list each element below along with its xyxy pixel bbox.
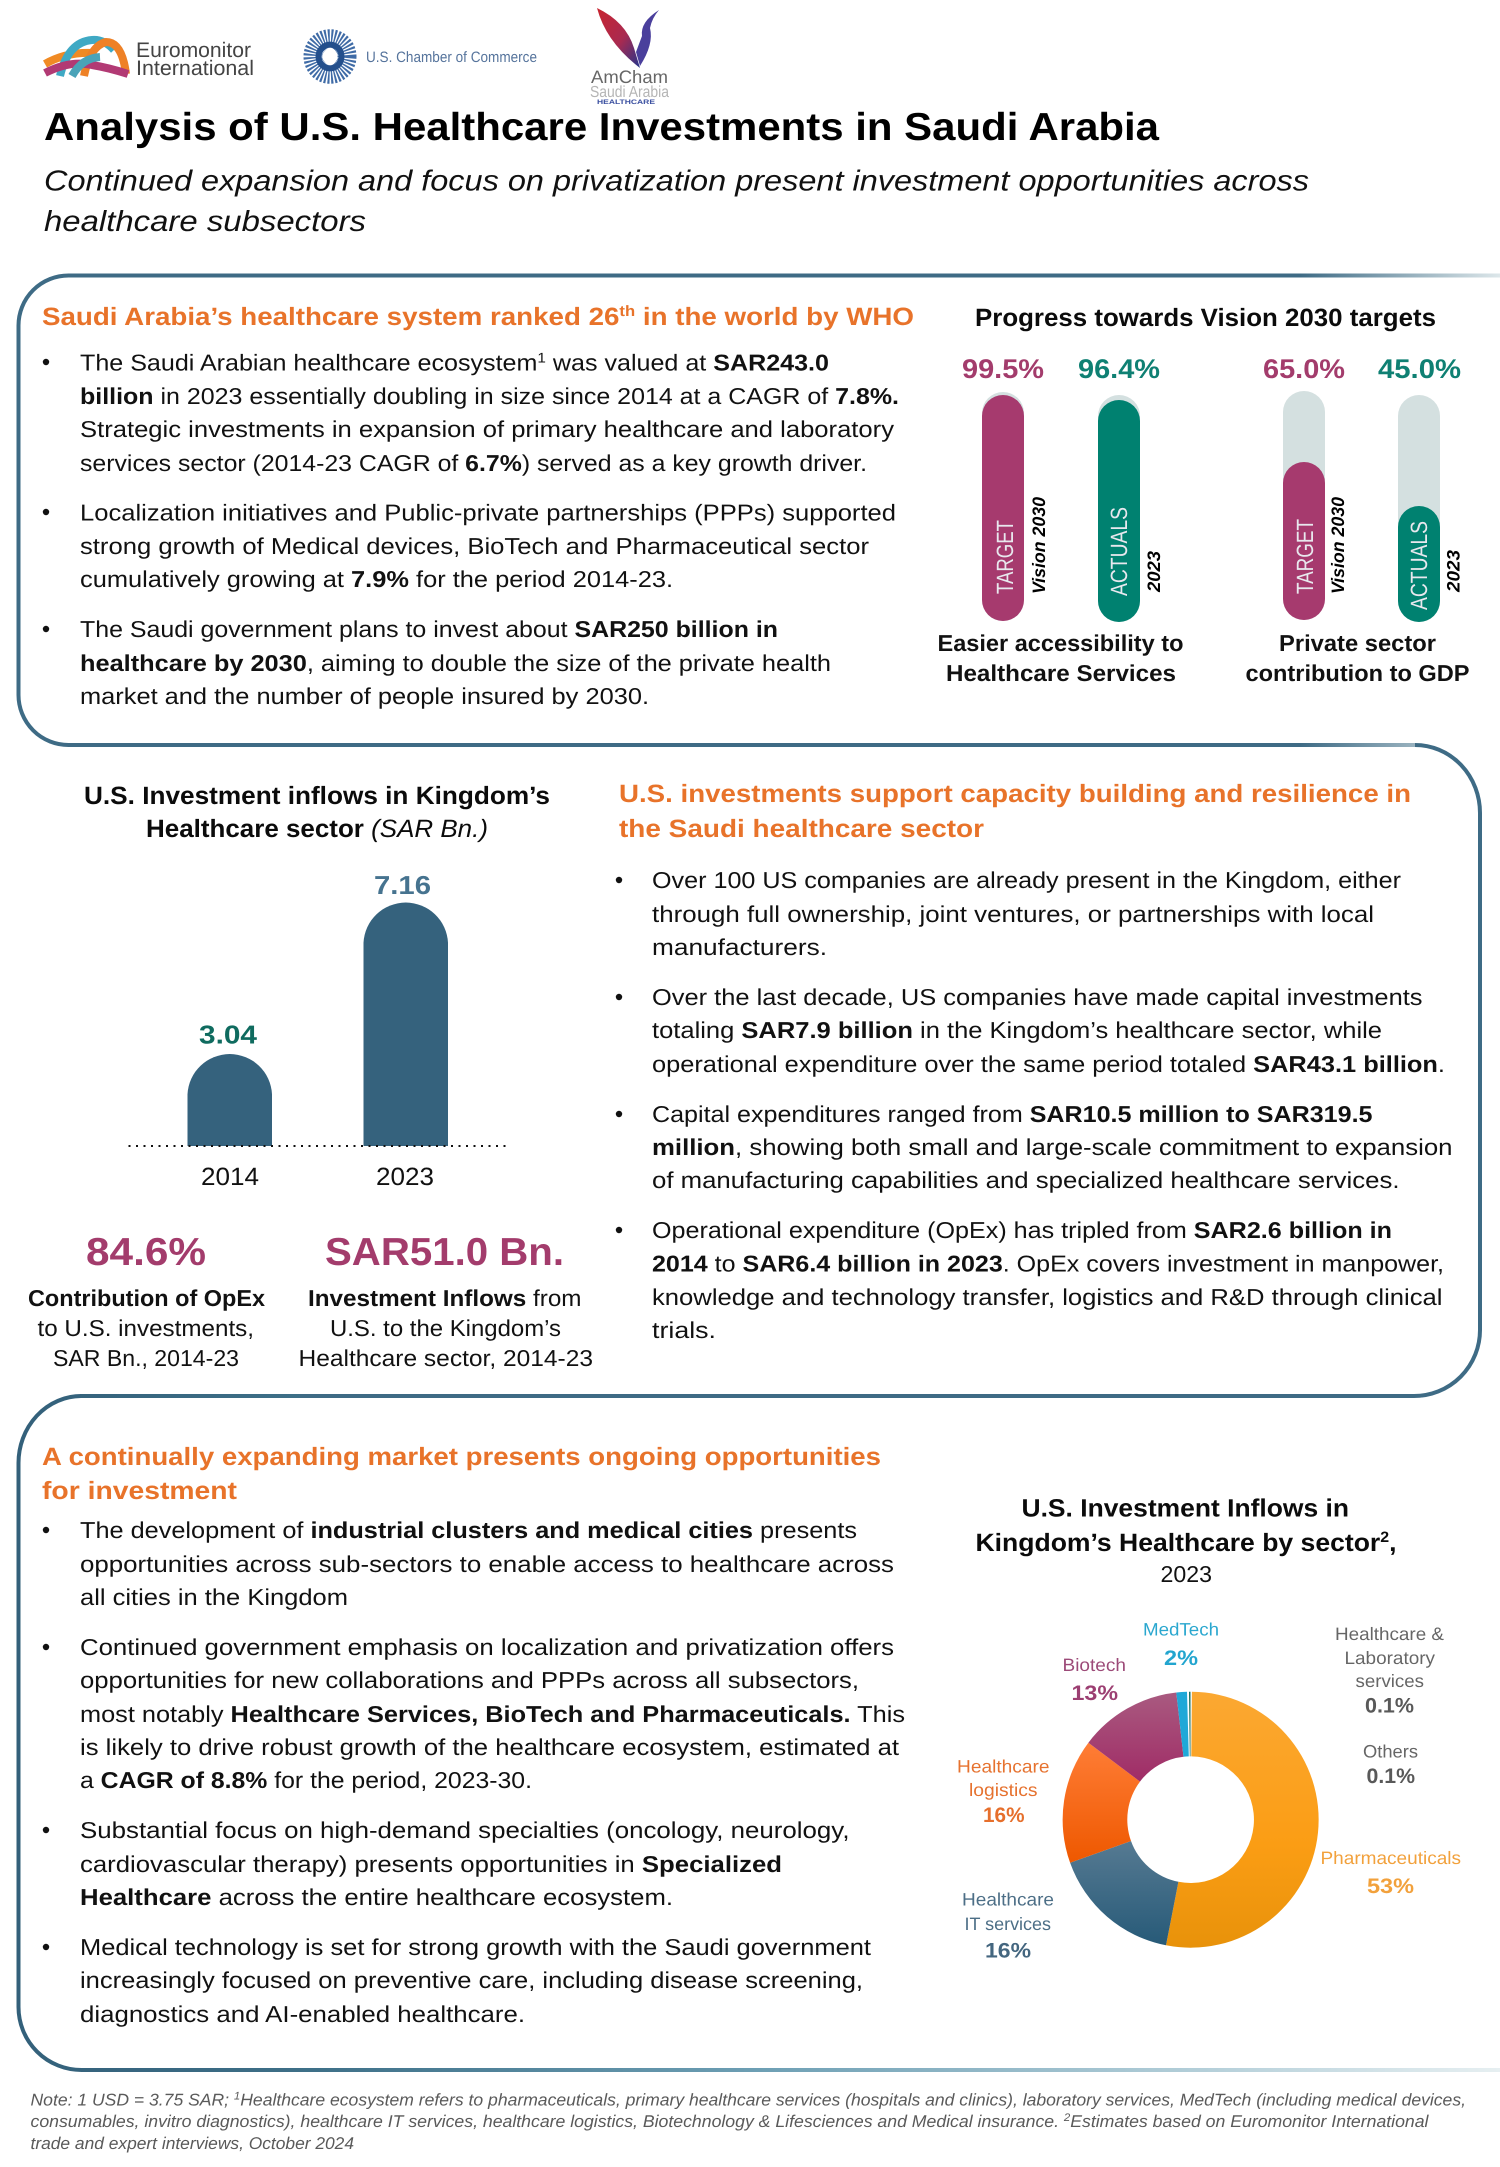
label: Healthcare and laboratory services: Healthcare & — [1335, 1624, 1444, 1644]
heading: expanding market: for investment — [42, 1477, 238, 1505]
bullet: industrial clusters: all cities in the Kingdom — [80, 1584, 348, 1610]
label: Healthcare IT services: Healthcare — [962, 1890, 1054, 1910]
footnote: trade and expert interviews, October 2024 — [30, 2134, 354, 2153]
bullet: US companies present: manufacturers. — [652, 934, 827, 960]
bullet: high-demand specialties: Substantial focus on high-demand specialties (oncology, neurology, — [80, 1817, 850, 1843]
label: MedTech: 2% — [1164, 1647, 1198, 1670]
bullet: industrial clusters: opportunities across sub-sectors to enable access to healthcare across — [80, 1551, 894, 1577]
label: Healthcare logistics — [957, 1756, 1050, 1827]
label: Others: 0.1% — [1366, 1765, 1415, 1788]
bullet: localization initiatives — [43, 500, 896, 592]
heading: system ranked 26th: in the world by WHO — [635, 303, 914, 331]
header logos — [45, 8, 669, 106]
bullet: government investment plan — [43, 616, 831, 709]
heading: inflows by sector: 2 — [1380, 1529, 1389, 1546]
panel: expanding market opportunities — [18, 1396, 1500, 2070]
segment: medtech — [1176, 1692, 1189, 1757]
bullet: industrial clusters — [43, 1517, 894, 1610]
bullet: government investment plan: The Saudi government plans to invest about SAR250 billion in — [80, 616, 778, 642]
bullet: government investment plan: healthcare by 2030 , aiming to double the size of the private health — [80, 650, 831, 676]
chart: private sector contribution bars: contribution to GDP — [1246, 660, 1470, 686]
label: Healthcare IT services: 16% — [985, 1940, 1031, 1962]
heading: capacity building — [619, 780, 1411, 843]
logo: Euromonitor International: International — [136, 57, 254, 80]
bullet: localization initiatives: strong growth of Medical devices, BioTech and Pharmaceutical sector — [80, 533, 869, 559]
label: Others: Others — [1363, 1742, 1418, 1762]
subtitle: Continued expansion and focus on privatization present investment opportunities across — [44, 166, 1309, 198]
bullet: government investment plan: market and the number of people insured by 2030. — [80, 683, 649, 709]
label: MedTech — [1143, 1620, 1219, 1670]
bullet: high-demand specialties: Healthcare across the entire healthcare ecosystem. — [80, 1884, 673, 1910]
footnote: consumables, invitro diagnostics), healthcare IT services, healthcare logistics, Biotechnology & Lifesciences and Medical insurance. — [30, 2112, 1021, 2131]
bullet: localization and privatization — [43, 1634, 905, 1793]
heading: system ranked 26th: Saudi Arabia’s healthcare system ranked 26 — [42, 303, 563, 331]
bullet: operational expenditure: 2014 to SAR6.4 billion in 2023 . OpEx covers investment in manpower, — [652, 1250, 1444, 1276]
bullet: US companies present: through full ownership, joint ventures, or partnerships with local — [652, 901, 1374, 927]
heading: system ranked 26th: th — [619, 303, 635, 320]
title: Analysis of U.S. Healthcare Investments in Saudi Arabia — [44, 106, 1159, 149]
stat: OpEx contribution: SAR Bn., 2014-23 — [53, 1345, 239, 1371]
stat: OpEx contribution: to U.S. investments, — [38, 1315, 254, 1341]
heading: expanding market: A continually expanding market presents ongoing opportunities — [42, 1443, 881, 1471]
footnote: 2 — [1063, 2112, 1070, 2124]
chart: easier accessibility progress bars: Easier accessibility to — [938, 630, 1184, 656]
bullet: capital investments: operational expenditure over the same period totaled SAR43.1 billion . — [652, 1051, 1445, 1077]
bar chart: inflows 2014 vs 2023: 2023 — [376, 1163, 434, 1191]
label: Others — [1363, 1742, 1418, 1788]
chart: private sector contribution bars: Private sector — [1279, 630, 1436, 656]
bullet: medical technology growth: increasingly focused on preventive care, including disease screening, — [80, 1967, 863, 1993]
chart: easier accessibility progress bars: ACTUALS — [1106, 507, 1132, 596]
bullet: localization and privatization: is likely to drive robust growth of the healthcare ecosystem, estimated at — [80, 1734, 900, 1760]
bullet: healthcare ecosystem value: services sector (2014-23 CAGR of 6.7%) served as a key growth driver. — [80, 450, 867, 476]
segment: others — [1189, 1692, 1190, 1756]
chart: easier accessibility progress bars: Healthcare Services — [946, 660, 1176, 686]
heading: inflows by sector: Kingdom’s Healthcare by sector — [976, 1529, 1357, 1557]
chart: private sector contribution bars: 2023 — [1444, 550, 1464, 593]
chart: easier accessibility progress bars: Vision 2030 — [1029, 497, 1049, 594]
bullet: US companies present — [616, 867, 1401, 960]
bar chart: inflows 2014 vs 2023: 3.04 — [199, 1020, 258, 1050]
logo: AmCham Saudi Arabia Healthcare: HEALTHCARE — [597, 99, 656, 106]
chart: private sector contribution bars: TARGET — [1292, 519, 1318, 594]
subtitle — [44, 166, 1309, 238]
label: Pharmaceuticals — [1320, 1848, 1461, 1898]
logo: AmCham Saudi Arabia Healthcare — [590, 8, 669, 106]
panel: healthcare system ranking — [18, 276, 1500, 745]
bullet: capital expenditures: Capital expenditures ranged from SAR10.5 million to SAR319.5 — [652, 1101, 1373, 1127]
bullet: healthcare ecosystem value — [43, 350, 899, 476]
bullet: healthcare ecosystem value: billion in 2023 essentially doubling in size since 2014 at a CAGR of 7.8%. — [80, 383, 899, 409]
label: Healthcare IT services — [962, 1890, 1054, 1962]
heading: capacity building: U.S. investments support capacity building and resilience in — [619, 780, 1411, 808]
bullet: operational expenditure: trials. — [652, 1317, 716, 1343]
bullet: medical technology growth — [43, 1934, 872, 2027]
label: MedTech: MedTech — [1143, 1620, 1219, 1640]
footnote: 1 — [234, 2090, 240, 2102]
bullet: localization and privatization: Continued government emphasis on localization and privatization offers — [80, 1634, 894, 1660]
label: Biotech — [1062, 1655, 1126, 1705]
chart: easier accessibility progress bars: 99.5% — [962, 354, 1044, 384]
bullet: high-demand specialties — [43, 1817, 850, 1910]
logo: Euromonitor International: Euromonitor — [136, 39, 251, 62]
heading: Healthcare sector unit: Healthcare sector (SAR Bn.) — [146, 815, 488, 843]
chart: easier accessibility progress bars: TARGET — [992, 520, 1018, 594]
heading: expanding market — [42, 1443, 881, 1505]
segment: healthcare IT services — [1070, 1841, 1178, 1945]
label: Healthcare logistics: logistics — [969, 1780, 1038, 1800]
segment: healthcare logistics — [1063, 1743, 1140, 1863]
bullet: high-demand specialties: cardiovascular therapy) presents opportunities in Specialized — [80, 1851, 782, 1877]
bullet: capital investments: Over the last decade, US companies have made capital investments — [652, 984, 1422, 1010]
stat: total investment inflows: SAR51.0 Bn. — [325, 1231, 564, 1274]
footnote — [30, 2090, 1466, 2153]
heading: progress towards Vision 2030: Progress towards Vision 2030 targets — [975, 304, 1436, 332]
label: Healthcare IT services: IT services — [964, 1914, 1051, 1934]
panel: U.S. investment inflows and capacity building — [28, 745, 1480, 1396]
donut chart: inflows by sector — [1063, 1692, 1319, 1948]
footnote: Estimates based on Euromonitor International — [1070, 2112, 1430, 2131]
label: Healthcare and laboratory services: Laboratory — [1344, 1648, 1435, 1668]
segment: biotech — [1088, 1692, 1184, 1782]
bullet: industrial clusters: The development of industrial clusters and medical cities presents — [80, 1517, 857, 1543]
bullet: capital investments — [616, 984, 1445, 1077]
bullet: healthcare ecosystem value: The Saudi Arabian healthcare ecosystem — [80, 350, 499, 376]
logo: AmCham Saudi Arabia Healthcare: AmCham — [591, 67, 668, 87]
bullet: healthcare ecosystem value: SAR243.0 — [713, 350, 829, 376]
bullet: capital investments: totaling SAR7.9 billion in the Kingdom’s healthcare sector, while — [652, 1017, 1382, 1043]
bullet: localization initiatives: Localization initiatives and Public-private partnerships (PPPs) supported — [80, 500, 896, 526]
bullet: medical technology growth: diagnostics and AI-enabled healthcare. — [80, 2001, 525, 2027]
stat: total investment inflows: U.S. to the Kingdom’s — [330, 1315, 561, 1341]
bullet: localization and privatization: most notably Healthcare Services, BioTech and Pharmaceuticals. This — [80, 1701, 905, 1727]
label: Healthcare and laboratory services: 0.1% — [1365, 1694, 1414, 1718]
chart: private sector contribution bars: 45.0% — [1378, 354, 1461, 384]
logo: Euromonitor International — [45, 39, 254, 80]
stat: OpEx contribution: Contribution of OpEx — [28, 1285, 265, 1311]
label: Biotech: 13% — [1072, 1682, 1118, 1705]
label: Healthcare and laboratory services — [1335, 1624, 1444, 1718]
heading: inflows by sector — [976, 1494, 1396, 1587]
bullet: operational expenditure: knowledge and technology transfer, logistics and R&D through clinical — [652, 1284, 1442, 1310]
label: Pharmaceuticals: Pharmaceuticals — [1320, 1848, 1461, 1868]
bullet: capital expenditures: of manufacturing capabilities and specialized healthcare services. — [652, 1167, 1400, 1193]
stat: total investment inflows: Healthcare sector, 2014-23 — [298, 1345, 593, 1371]
bullet: localization and privatization: a CAGR of 8.8% for the period, 2023-30. — [80, 1767, 532, 1793]
chart: easier accessibility progress bars — [938, 354, 1184, 686]
logo: U.S. Chamber of Commerce: U.S. Chamber of Commerce — [366, 49, 537, 66]
chart: private sector contribution bars: ACTUALS — [1406, 521, 1432, 610]
logo: U.S. Chamber of Commerce — [313, 39, 537, 74]
heading: inflows by sector: 2023 — [1160, 1561, 1212, 1587]
bullet: healthcare ecosystem value: was valued at — [546, 350, 713, 376]
bullet: healthcare ecosystem value: Strategic investments in expansion of primary healthcare and laboratory — [80, 416, 895, 442]
heading: U.S. investment inflows chart: U.S. Investment inflows in Kingdom’s — [84, 782, 550, 810]
bullet: healthcare ecosystem value: 1 — [537, 350, 546, 366]
segment: pharmaceuticals — [1166, 1692, 1319, 1948]
logo: AmCham Saudi Arabia Healthcare: Saudi Arabia — [590, 84, 669, 101]
bullet: US companies present: Over 100 US companies are already present in the Kingdom, either — [652, 867, 1401, 893]
bar chart: inflows 2014 vs 2023: 2014 — [201, 1163, 259, 1191]
stat: total investment inflows: Investment Inflows from — [308, 1285, 582, 1311]
bullet: operational expenditure: Operational expenditure (OpEx) has tripled from SAR2.6 billion in — [652, 1217, 1392, 1243]
label: Pharmaceuticals: 53% — [1367, 1875, 1414, 1898]
label: Biotech: Biotech — [1062, 1655, 1126, 1675]
bullet: localization and privatization: opportunities for new collaborations and PPPs across all subsectors, — [80, 1667, 859, 1693]
chart: private sector contribution bars — [1246, 354, 1470, 686]
bullet: capital expenditures: million , showing both small and large-scale commitment to expansion — [652, 1134, 1452, 1160]
bullet: capital expenditures — [616, 1101, 1452, 1193]
bullet: medical technology growth: Medical technology is set for strong growth with the Saudi government — [80, 1934, 872, 1960]
footnote: Healthcare ecosystem refers to pharmaceuticals, primary healthcare services (hospitals and clinics), laboratory services, MedTech (including medical devices, — [240, 2090, 1466, 2110]
bar chart: inflows 2014 vs 2023 — [128, 870, 507, 1191]
stat: OpEx contribution — [28, 1231, 265, 1371]
heading: inflows by sector: , — [1389, 1529, 1396, 1557]
chart: easier accessibility progress bars: 2023 — [1144, 551, 1164, 593]
chart: private sector contribution bars: Vision 2030 — [1328, 497, 1348, 594]
stat: total investment inflows — [298, 1231, 593, 1371]
bullet: operational expenditure — [616, 1217, 1444, 1343]
label: Healthcare and laboratory services: services — [1356, 1671, 1424, 1691]
heading: capacity building: the Saudi healthcare sector — [619, 815, 984, 843]
subtitle: healthcare subsectors — [44, 206, 366, 238]
stat: OpEx contribution: 84.6% — [86, 1231, 206, 1274]
bar chart: inflows 2014 vs 2023: 7.16 — [374, 870, 431, 900]
bullet: localization initiatives: cumulatively growing at 7.9% for the period 2014-23. — [80, 566, 673, 592]
label: Healthcare logistics: Healthcare — [957, 1756, 1050, 1776]
label: Healthcare logistics: 16% — [983, 1804, 1025, 1827]
footnote: Note: 1 USD = 3.75 SAR; — [30, 2090, 223, 2110]
chart: easier accessibility progress bars: 96.4% — [1078, 354, 1160, 384]
chart: private sector contribution bars: 65.0% — [1263, 354, 1345, 384]
heading: inflows by sector: U.S. Investment Inflows in — [1022, 1494, 1349, 1522]
